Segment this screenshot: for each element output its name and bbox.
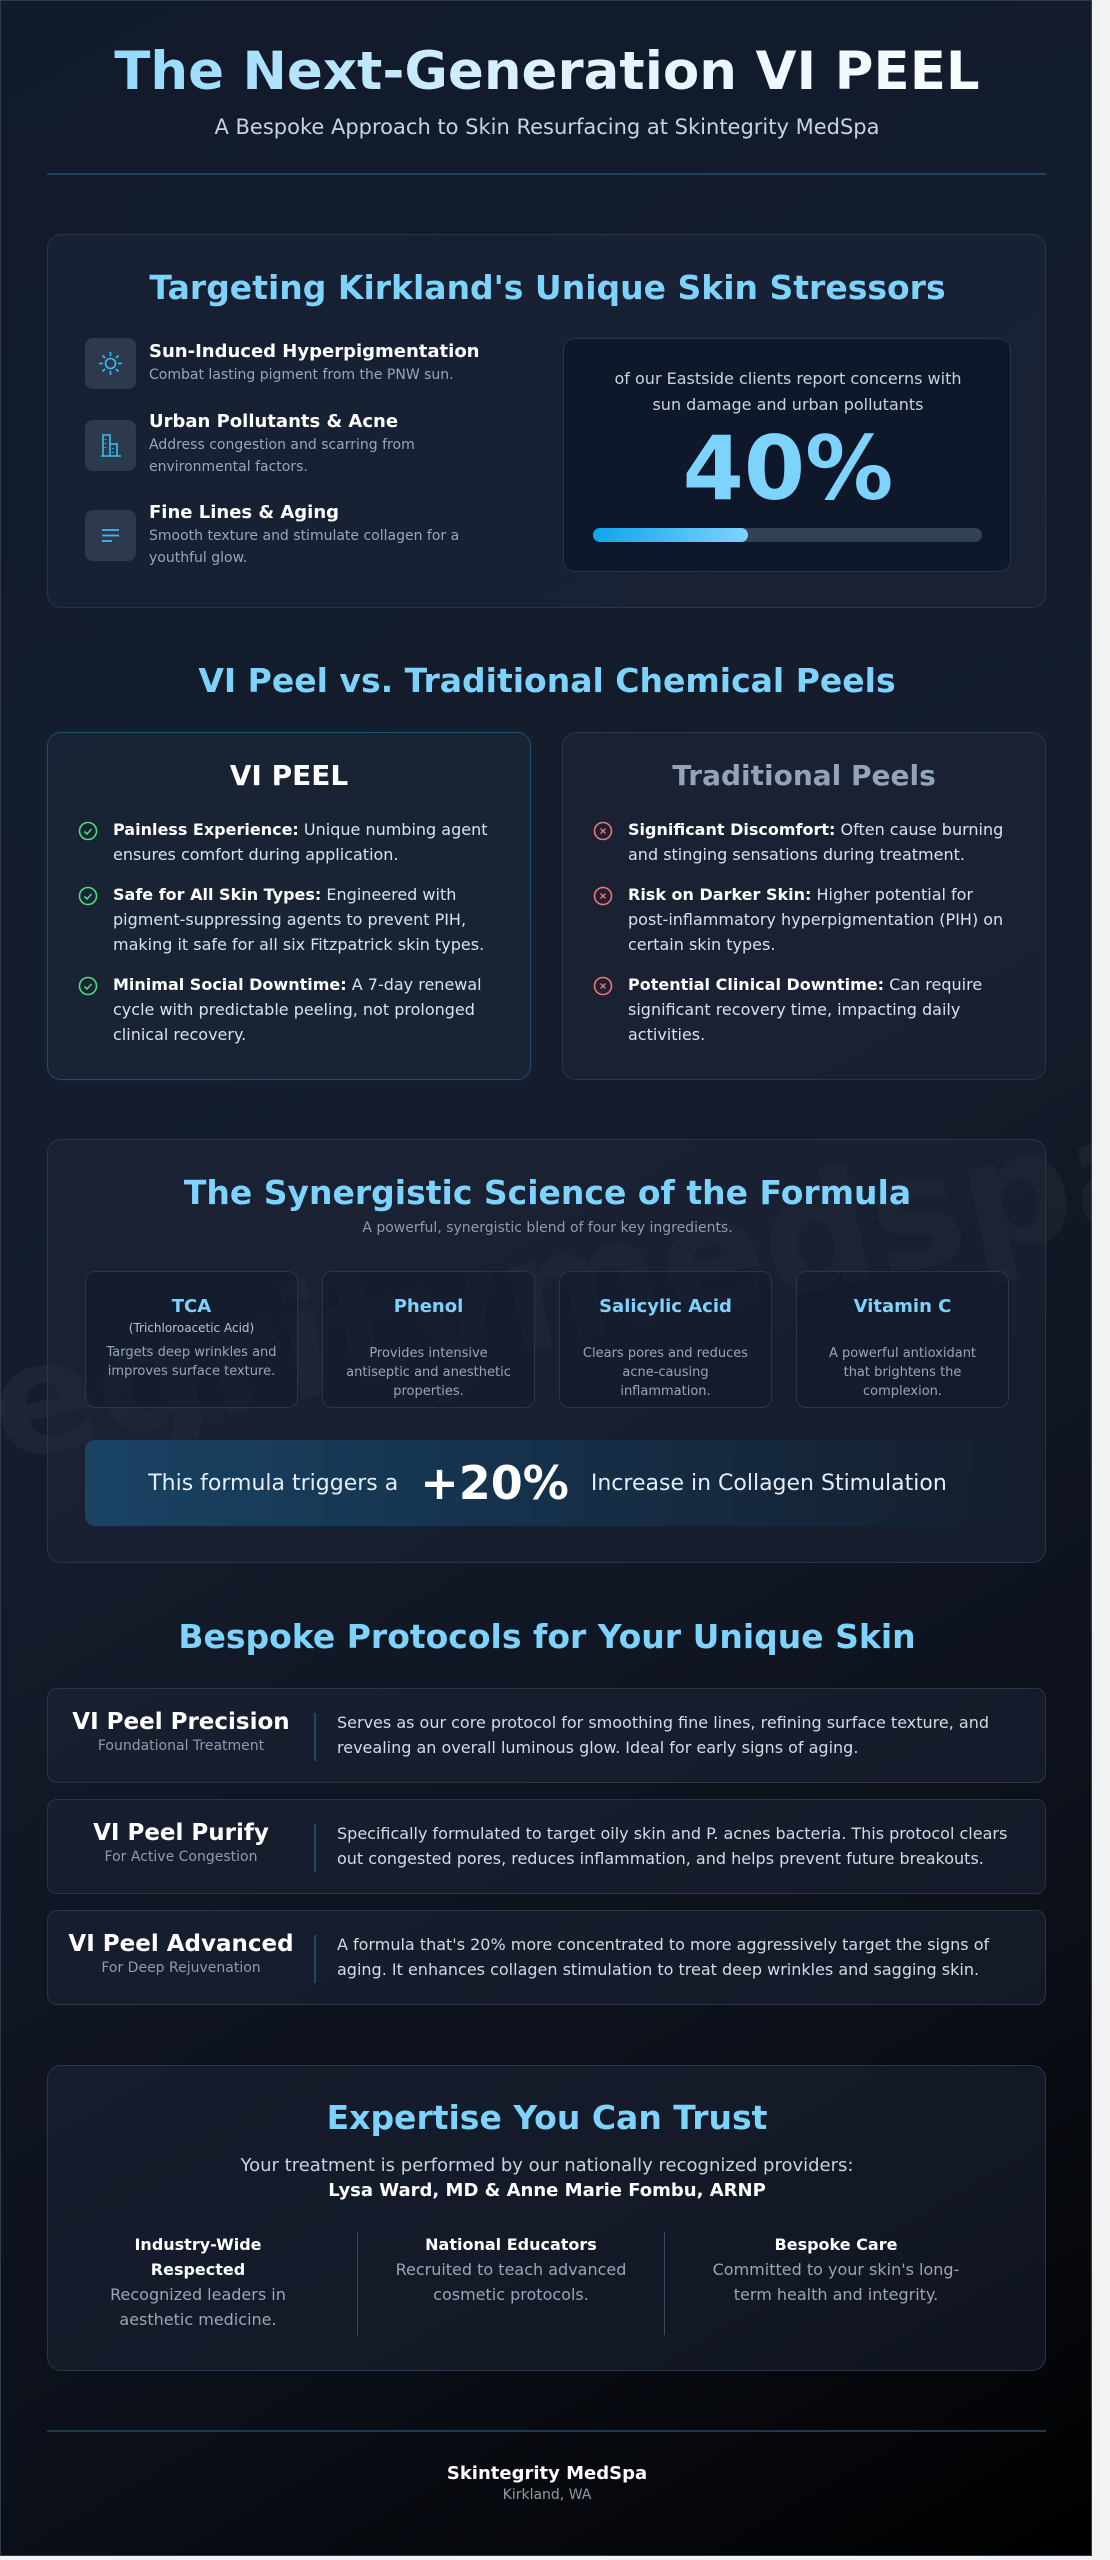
icon: building bbox=[85, 420, 136, 471]
panel: traditional peels: Traditional Peels bbox=[672, 759, 936, 792]
item: fine lines bbox=[149, 502, 459, 566]
item: sun: Combat lasting pigment from the PNW sun. bbox=[149, 367, 454, 383]
column: educators bbox=[396, 2235, 626, 2304]
card: Salicylic bbox=[559, 1271, 772, 1408]
heading: formula: The Synergistic Science of the Formula bbox=[184, 1173, 911, 1212]
row: purify: VI Peel Purify bbox=[93, 1820, 269, 1846]
item: pollutants: Urban Pollutants & Acne bbox=[149, 411, 398, 432]
stat box: 40%: sun damage and urban pollutants bbox=[652, 395, 924, 414]
column: bespoke: Bespoke Care bbox=[775, 2235, 897, 2254]
item: sun: Sun-Induced Hyperpigmentation bbox=[149, 341, 480, 362]
banner: collagen: Increase in Collagen Stimulation bbox=[591, 1470, 947, 1496]
icon: lines bbox=[85, 510, 136, 561]
row: precision bbox=[47, 1688, 1046, 1783]
heading: expertise: Expertise You Can Trust bbox=[327, 2098, 767, 2137]
card: Vitamin C bbox=[796, 1271, 1009, 1408]
row: precision: Serves as our core protocol for smoothing fine lines, refining surface texture, and revealing an overall luminous glow. Ideal for early signs of aging. bbox=[337, 1713, 989, 1757]
banner: collagen: +20% bbox=[420, 1456, 569, 1510]
item: pollutants bbox=[149, 411, 415, 475]
card: Phenol: Provides intensive antiseptic and anesthetic properties. bbox=[346, 1346, 511, 1399]
heading: comparison: VI Peel vs. Traditional Chemical Peels bbox=[198, 661, 896, 700]
column: industry bbox=[110, 2235, 286, 2329]
progress bar bbox=[593, 528, 982, 542]
row: advanced: A formula that's 20% more concentrated to more aggressively target the signs of aging. It enhances collagen stimulation to treat deep wrinkles and sagging skin. bbox=[337, 1935, 989, 1979]
column: educators: Recruited to teach advanced cosmetic protocols. bbox=[396, 2260, 626, 2304]
card: TCA: Targets deep wrinkles and improves surface texture. bbox=[106, 1345, 277, 1379]
subtitle: A Bespoke Approach to Skin Resurfacing at Skintegrity MedSpa bbox=[214, 115, 880, 139]
item: pollutants: Address congestion and scarring from environmental factors. bbox=[149, 437, 415, 475]
item: fine lines: Fine Lines & Aging bbox=[149, 502, 339, 523]
banner: collagen: This formula triggers a bbox=[148, 1470, 398, 1496]
column: bespoke: Committed to your skin's long-term health and integrity. bbox=[713, 2260, 959, 2304]
panel: formula bbox=[47, 1139, 1046, 1563]
panel: formula: A powerful, synergistic blend of four key ingredients. bbox=[362, 1220, 733, 1236]
card: Phenol bbox=[322, 1271, 535, 1408]
card: Salicylic: Salicylic Acid bbox=[599, 1296, 732, 1317]
row: advanced: For Deep Rejuvenation bbox=[101, 1960, 261, 1976]
card: Vitamin C: Vitamin C bbox=[854, 1296, 951, 1317]
column: industry: Industry-Wide Respected bbox=[134, 2235, 262, 2279]
card: Salicylic: Clears pores and reduces acne-causing inflammation. bbox=[583, 1346, 748, 1399]
footer: Kirkland, WA bbox=[503, 2487, 591, 2503]
item: fine lines: Smooth texture and stimulate collagen for a youthful glow. bbox=[149, 528, 459, 566]
title: The Next-Generation VI PEEL bbox=[114, 41, 980, 102]
row: purify bbox=[47, 1799, 1046, 1894]
panel: traditional peels: Risk on Darker Skin: Higher potential for post-inflammatory hyperpigmentation (PIH) on certain skin types. bbox=[628, 885, 1003, 954]
stat box: 40% bbox=[563, 338, 1011, 572]
card: TCA: TCA bbox=[172, 1296, 211, 1317]
row: advanced: VI Peel Advanced bbox=[68, 1931, 294, 1957]
card: Vitamin C: A powerful antioxidant that brightens the complexion. bbox=[829, 1346, 976, 1399]
footer: Skintegrity MedSpa bbox=[447, 2463, 647, 2484]
row: advanced bbox=[47, 1910, 1046, 2005]
row: precision: Foundational Treatment bbox=[98, 1738, 264, 1754]
panel: skin stressors bbox=[47, 234, 1046, 608]
banner: collagen bbox=[85, 1440, 1010, 1526]
column: bespoke bbox=[713, 2235, 959, 2304]
panel: VI PEEL: Safe for All Skin Types: Engineered with pigment-suppressing agents to prevent PIH, making it safe for all six Fitzpatrick skin types. bbox=[113, 885, 484, 954]
text: Your treatment is performed by our nationally recognized providers: bbox=[241, 2155, 853, 2176]
panel: VI PEEL: Minimal Social Downtime: A 7-day renewal cycle with predictable peeling, not prolonged clinical recovery. bbox=[113, 975, 482, 1044]
panel: traditional peels bbox=[562, 732, 1046, 1080]
row: precision: VI Peel Precision bbox=[72, 1709, 290, 1735]
text: Lysa Ward, MD & Anne Marie Fombu, ARNP bbox=[328, 2180, 766, 2201]
row: purify: For Active Congestion bbox=[105, 1849, 257, 1865]
panel: VI PEEL: VI PEEL bbox=[230, 759, 348, 792]
stat box: 40%: 40% bbox=[683, 417, 893, 520]
card: TCA: (Trichloroacetic Acid) bbox=[129, 1321, 254, 1335]
panel: traditional peels: Potential Clinical Downtime: Can require significant recovery time, impacting daily activities. bbox=[628, 975, 982, 1044]
item: sun bbox=[149, 341, 480, 383]
icon: sun bbox=[85, 338, 136, 389]
card: TCA bbox=[85, 1271, 298, 1408]
stat box: 40%: of our Eastside clients report concerns with bbox=[614, 369, 961, 388]
panel: expertise bbox=[47, 2065, 1046, 2371]
panel: VI PEEL: Painless Experience: Unique numbing agent ensures comfort during application. bbox=[113, 820, 488, 864]
column: educators: National Educators bbox=[425, 2235, 597, 2254]
heading: stressors: Targeting Kirkland's Unique Skin Stressors bbox=[149, 268, 946, 307]
panel: traditional peels: Significant Discomfort: Often cause burning and stinging sensations during treatment. bbox=[628, 820, 1003, 864]
row: purify: Specifically formulated to target oily skin and P. acnes bacteria. This protocol clears out congested pores, reduces inflammation, and helps prevent future breakouts. bbox=[337, 1824, 1007, 1868]
card: Phenol: Phenol bbox=[394, 1296, 463, 1317]
heading: protocols: Bespoke Protocols for Your Unique Skin bbox=[178, 1617, 916, 1656]
panel: VI PEEL bbox=[47, 732, 531, 1080]
column: industry: Recognized leaders in aesthetic medicine. bbox=[110, 2285, 286, 2329]
footer bbox=[447, 2463, 647, 2503]
